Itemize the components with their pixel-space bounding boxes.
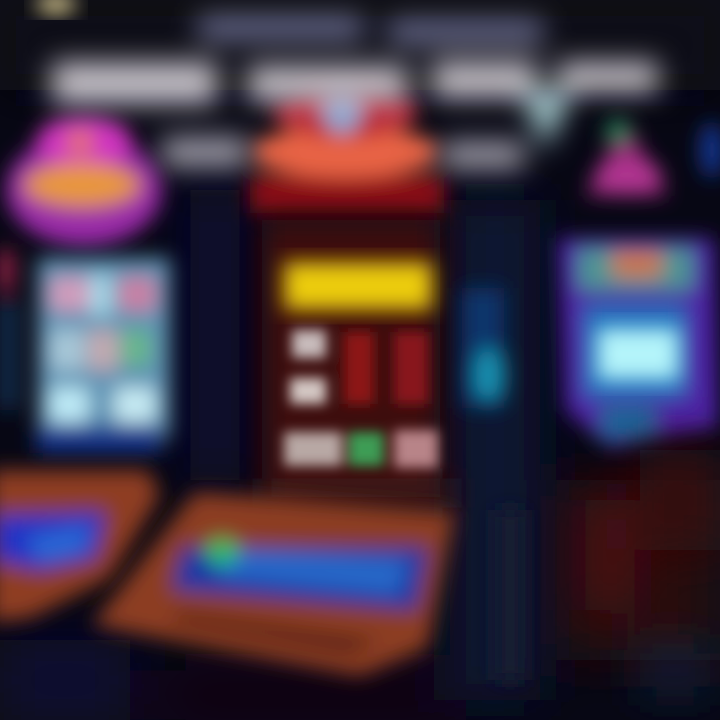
- right machine bright screen: [597, 328, 679, 380]
- title line 3: [162, 138, 524, 168]
- left machine screen: [0, 250, 170, 453]
- title accent: [522, 92, 572, 150]
- centre machine cabinet: [262, 220, 452, 508]
- side panel blue lights: [462, 288, 525, 680]
- right machine: [558, 118, 720, 448]
- centre machine topper: [250, 86, 444, 213]
- title line 2: [52, 62, 658, 104]
- blurred title text: [52, 16, 658, 168]
- title line 1: [198, 16, 543, 44]
- centre machine console: [92, 492, 455, 676]
- right figure: [585, 450, 720, 690]
- left machine: [0, 116, 170, 622]
- right machine topper: [585, 118, 720, 196]
- left machine topper: [6, 116, 162, 246]
- lamp top left: [36, 0, 76, 14]
- right machine screen frame: [558, 238, 718, 448]
- centre machine reels: [284, 330, 438, 468]
- left machine console: [0, 470, 160, 622]
- centre machine jackpot row: [284, 262, 432, 310]
- centre machine: [92, 86, 455, 676]
